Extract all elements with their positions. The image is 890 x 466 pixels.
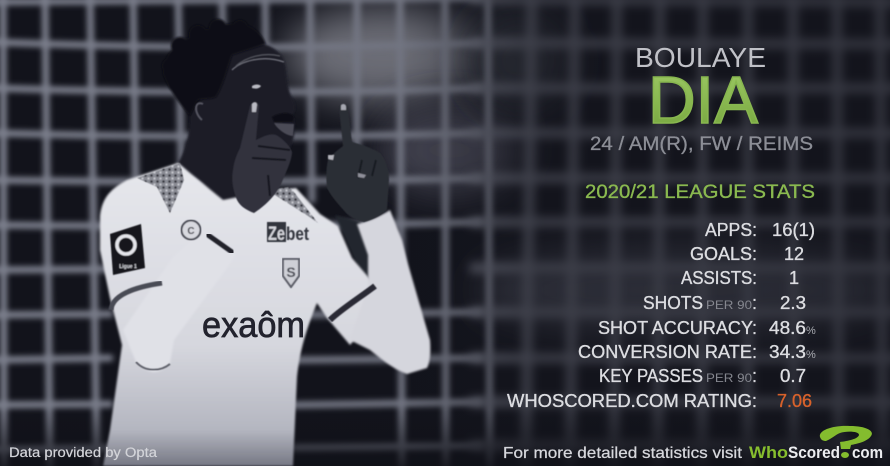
stats table [507, 220, 816, 411]
WhoScored logo [749, 426, 883, 462]
left hand [232, 102, 292, 213]
jersey torso [100, 163, 380, 466]
stat: shot accuracy: SHOT ACCURACY: [598, 318, 757, 338]
stat: shots: : [752, 293, 757, 313]
stat: assists: 1 [789, 268, 799, 288]
stat: apps [705, 220, 815, 240]
Ligue 1 sleeve badge [110, 224, 145, 275]
age, position, club: 24 / AM(R), FW / REIMS [590, 134, 813, 155]
stat: shots: SHOTS [643, 293, 703, 313]
viewer-left forearm [123, 230, 236, 372]
sponsor: Zebet [267, 222, 309, 245]
stat: conversion rate: CONVERSION RATE: [578, 342, 757, 362]
club logo on chest [182, 220, 200, 240]
club crest: S [286, 264, 296, 280]
stat: conversion rate: % [806, 349, 816, 361]
elbow shadow [136, 362, 170, 370]
stat: key passes: KEY PASSES [599, 366, 703, 386]
club logo on chest: C [187, 226, 195, 237]
collar trim left [137, 163, 184, 213]
stat: assists: ASSISTS: [681, 268, 757, 288]
logo wordmark: Who [749, 443, 788, 462]
right hand [326, 104, 389, 222]
stat: goals [690, 244, 804, 264]
player neck and face [178, 44, 295, 215]
player facial highlights [196, 55, 294, 136]
heading: player name [590, 42, 813, 155]
stat: goals: GOALS: [690, 244, 757, 264]
stat: conversion rate: 34.3 [769, 342, 806, 362]
icon: question mark [820, 426, 872, 458]
club crest [283, 259, 299, 287]
player photo [100, 19, 430, 466]
stat: assists [681, 268, 799, 288]
player hair [162, 19, 266, 116]
stat: shot accuracy: 48.6 [769, 318, 806, 338]
stat: key passes: PER 90 [706, 373, 752, 385]
raised forearm sleeve [350, 210, 430, 374]
Ligue 1 sleeve badge: Ligue 1 [119, 264, 137, 270]
footer text: For more detailed statistics visit [503, 445, 743, 462]
first name: BOULAYE [635, 42, 766, 73]
stat: shots: PER 90 [706, 300, 752, 312]
stat: apps: 16(1) [772, 220, 815, 240]
collar trim right [267, 187, 318, 223]
raised arm upper skin [335, 215, 378, 284]
stat: shot accuracy: % [806, 325, 816, 337]
logo wordmark: com [852, 443, 883, 462]
logo wordmark: Scored [788, 443, 840, 462]
stat: key passes: : [752, 366, 757, 386]
stat: goals: 12 [784, 244, 804, 264]
stat: rating: 7.06 [777, 391, 812, 411]
sponsor: Zebet: Ze [268, 224, 285, 245]
sponsor: exaom: exaôm [202, 304, 305, 345]
stat: shots [643, 293, 806, 313]
stat: rating: WHOSCORED.COM RATING: [507, 391, 757, 411]
sponsor: Zebet: bet [286, 224, 309, 244]
stat: shots: 2.3 [780, 293, 806, 313]
surname: DIA [648, 63, 758, 138]
stat: key passes: 0.7 [780, 366, 806, 386]
stat: key passes [599, 366, 806, 386]
stat: apps: APPS: [705, 220, 757, 240]
wristband [208, 235, 232, 252]
text: data credit: Data provided by Opta [9, 445, 158, 460]
heading: league stats: 2020/21 LEAGUE STATS [585, 182, 815, 203]
sleeve stripes [111, 283, 375, 320]
